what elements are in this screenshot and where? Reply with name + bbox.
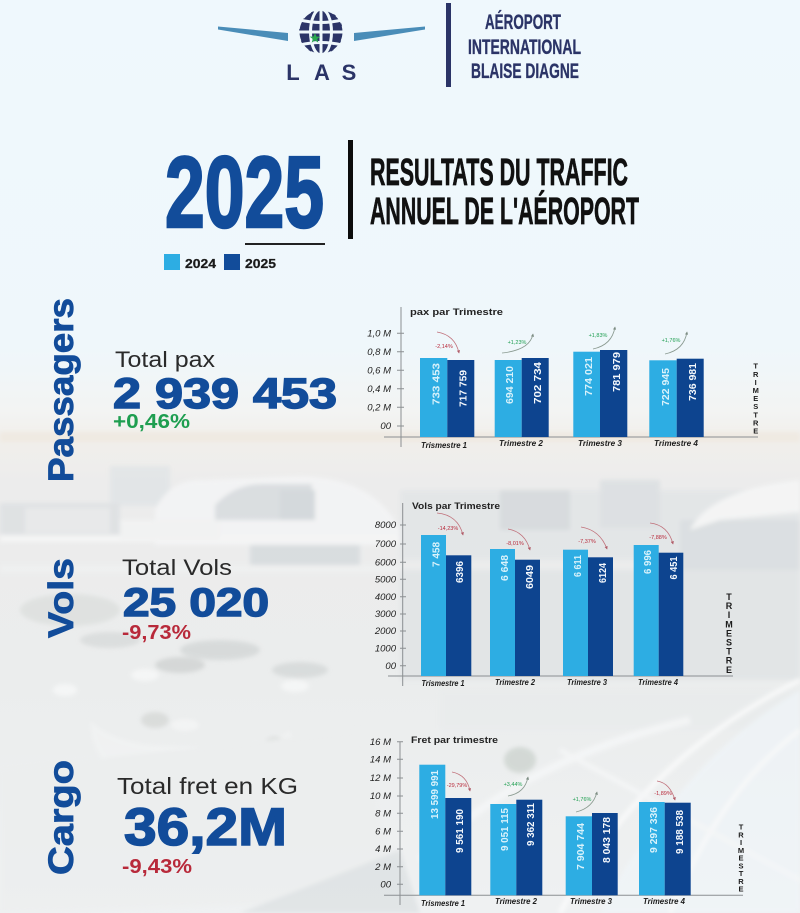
stat: total flights: -9,73% — [122, 622, 191, 644]
chart: freight per quarter: 14 M — [370, 754, 391, 766]
stat: total passengers: Total pax — [115, 347, 215, 372]
chart: flights per quarter: Trimestre 2 — [495, 677, 535, 687]
airport name: AÉROPORT — [485, 11, 561, 34]
legend — [164, 254, 276, 271]
chart: flights per quarter: -14,23% — [438, 526, 458, 532]
heading: title — [370, 152, 639, 233]
chart: freight per quarter: 4 M — [375, 844, 391, 855]
chart: flights per quarter: Vols par Trimestre — [412, 501, 500, 512]
chart: passengers per quarter: 702 734 — [532, 362, 544, 404]
chart: passengers per quarter: 781 979 — [611, 352, 623, 392]
chart: passengers per quarter: 0,8 M — [367, 347, 391, 358]
chart: flights per quarter: 4000 — [375, 592, 397, 603]
chart: flights per quarter: 00 — [385, 661, 397, 672]
chart: freight per quarter: 9 188 538 — [674, 810, 686, 854]
chart: freight per quarter: 10 M — [370, 791, 391, 802]
stat: total passengers: +0,46% — [113, 411, 190, 433]
logo letters: A — [314, 60, 330, 85]
chart: flights per quarter: Trimestre 3 — [567, 677, 607, 687]
chart: passengers per quarter: 00 — [380, 421, 392, 432]
chart: flights per quarter: Trimestre 4 — [638, 677, 678, 687]
chart: passengers per quarter — [367, 307, 759, 450]
icon: globe — [298, 9, 344, 55]
chart: freight per quarter: 9 362 311 — [525, 803, 537, 846]
logo: LAS — [218, 9, 425, 85]
chart: freight per quarter: -1,89% — [654, 791, 672, 797]
stat: total passengers — [113, 347, 337, 433]
chart: freight per quarter: 12 M — [370, 773, 391, 784]
chart: passengers per quarter: pax par Trimestre — [410, 307, 503, 318]
chart: flights per quarter: 6124 — [597, 563, 609, 583]
chart: passengers per quarter: 0,2 M — [367, 402, 391, 414]
chart: freight per quarter: +3,44% — [504, 782, 523, 788]
stat: total freight — [117, 773, 298, 878]
chart: freight per quarter: TRIMESTRE — [738, 822, 744, 894]
chart: freight per quarter: -29,79% — [447, 783, 467, 789]
chart: flights per quarter — [374, 501, 733, 688]
chart: passengers per quarter: +1,76% — [662, 338, 681, 344]
chart: freight per quarter: 8 043 178 — [601, 817, 613, 863]
chart: passengers per quarter: +1,83% — [589, 333, 608, 339]
chart: flights per quarter: TRIMESTRE — [725, 592, 733, 675]
chart: passengers per quarter: 0,4 M — [367, 384, 391, 395]
chart: freight per quarter: 16 M — [370, 737, 391, 748]
stat: total passengers: 2 939 453 — [113, 370, 337, 418]
heading: year: 2025 — [165, 137, 324, 249]
chart: passengers per quarter: 717 759 — [458, 370, 470, 407]
icon: star — [310, 33, 320, 43]
chart: passengers per quarter: +1,23% — [508, 340, 527, 346]
chart: passengers per quarter: 722 945 — [660, 368, 672, 406]
chart: flights per quarter: 7000 — [375, 539, 397, 550]
chart: freight per quarter: 9 051 115 — [499, 808, 511, 851]
chart: flights per quarter: 3000 — [375, 609, 397, 620]
chart: freight per quarter: 7 904 744 — [575, 823, 587, 870]
chart: freight per quarter: 8 M — [375, 808, 391, 820]
chart: passengers per quarter: Trimestre 3 — [578, 438, 622, 448]
chart: passengers per quarter: 736 981 — [687, 363, 699, 401]
chart: passengers per quarter: Trismestre 1 — [421, 440, 467, 450]
chart: flights per quarter: -8,01% — [506, 541, 524, 547]
chart: freight per quarter: 13 599 991 — [429, 770, 441, 819]
section label: Cargo: Cargo — [42, 760, 81, 875]
chart: freight per quarter: 00 — [380, 880, 392, 890]
chart: freight per quarter: Trimestre 3 — [570, 896, 612, 906]
stat: total freight: Total fret en KG — [117, 773, 298, 799]
chart: flights per quarter: 5000 — [375, 574, 397, 586]
chart: freight per quarter: 9 297 336 — [648, 807, 660, 853]
chart: flights per quarter: 1000 — [375, 644, 397, 654]
section label: Passagers: Passagers — [42, 298, 81, 482]
chart: flights per quarter: 8000 — [375, 520, 397, 531]
chart: freight per quarter: 6 M — [375, 826, 391, 838]
chart: passengers per quarter: Trimestre 2 — [499, 438, 543, 448]
logo letters: S — [342, 60, 356, 85]
divider: logo — [446, 3, 451, 87]
chart: freight per quarter: Trimestre 4 — [643, 896, 685, 906]
logo letters: L — [286, 60, 300, 85]
chart: passengers per quarter: -2,14% — [435, 344, 453, 350]
chart: flights per quarter: 6000 — [375, 558, 397, 568]
chart: flights per quarter: 6 648 — [499, 555, 511, 581]
chart: flights per quarter: 7 458 — [430, 542, 442, 567]
chart: freight per quarter: Trismestre 1 — [421, 898, 465, 908]
chart: flights per quarter: 6 996 — [642, 550, 654, 574]
chart: passengers per quarter: 694 210 — [504, 366, 516, 404]
stat: total freight: 36,2M — [124, 798, 287, 857]
chart: passengers per quarter: 733 453 — [430, 363, 442, 405]
chart: passengers per quarter: Trimestre 4 — [654, 438, 698, 448]
chart: flights per quarter: 6049 — [524, 565, 536, 589]
legend: 2024 — [185, 257, 216, 271]
airport name: INTERNATIONAL — [468, 36, 581, 59]
chart: passengers per quarter: TRIMESTRE — [753, 362, 759, 436]
chart: passengers per quarter: 774 021 — [583, 357, 595, 396]
chart: freight per quarter: 2 M — [374, 862, 391, 873]
chart: flights per quarter: 6 611 — [572, 555, 584, 577]
divider: heading — [348, 140, 353, 239]
logo letters — [286, 60, 356, 85]
airport name: BLAISE DIAGNE — [471, 60, 579, 83]
stat: total flights: 25 020 — [123, 581, 269, 625]
stat: total flights — [122, 555, 269, 644]
chart: flights per quarter: Trismestre 1 — [422, 678, 465, 688]
chart: flights per quarter: -7,88% — [649, 535, 667, 541]
icon: right wing — [354, 26, 425, 41]
year underline — [245, 243, 325, 245]
chart: freight per quarter: +1,76% — [573, 797, 592, 803]
chart: flights per quarter: 6396 — [454, 561, 466, 583]
chart: flights per quarter: 6 451 — [668, 556, 680, 580]
chart: freight per quarter — [370, 735, 744, 908]
chart: passengers per quarter: 1,0 M — [367, 328, 391, 340]
chart: freight per quarter: Fret par trimestre — [411, 735, 498, 746]
icon: left wing — [218, 26, 288, 41]
chart: flights per quarter: -7,37% — [578, 539, 596, 545]
chart: passengers per quarter: 0,6 M — [367, 366, 391, 376]
chart: freight per quarter: 9 561 190 — [454, 809, 466, 853]
chart: flights per quarter: 2000 — [374, 626, 397, 637]
chart: freight per quarter: Trimestre 2 — [495, 896, 537, 906]
stat: total freight: -9,43% — [122, 856, 192, 878]
airport name — [468, 11, 581, 83]
section label: Vols: Vols — [42, 558, 81, 638]
stat: total flights: Total Vols — [122, 555, 232, 580]
legend: 2025 — [245, 257, 276, 271]
